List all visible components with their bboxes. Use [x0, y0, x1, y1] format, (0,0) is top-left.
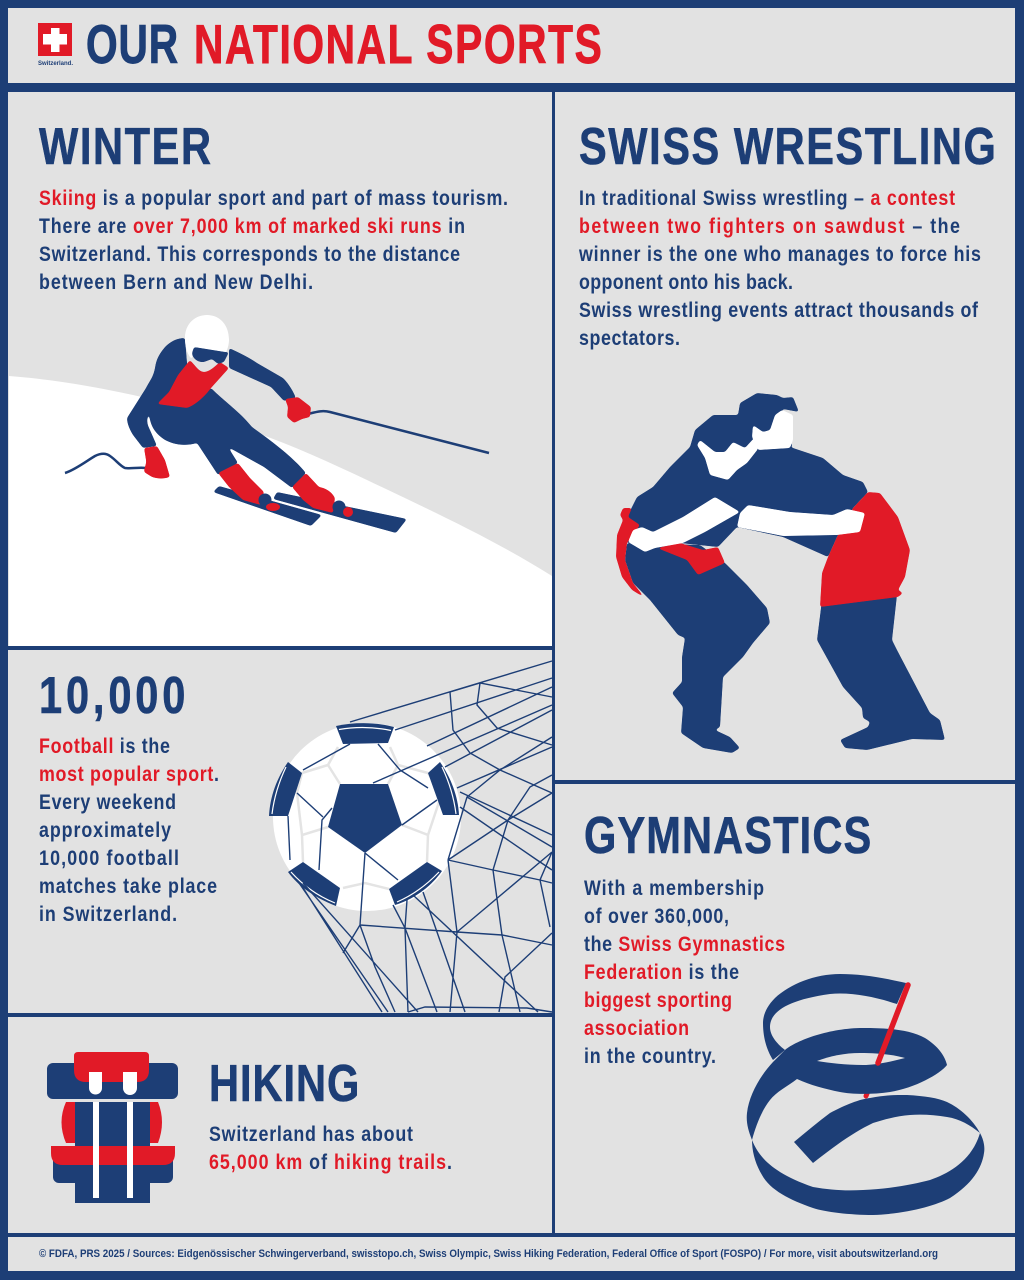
heading: winter: WINTER [39, 117, 211, 175]
text: swiss wrestling: winner is the one who manages to force his [578, 243, 981, 266]
text: football: approximately [39, 819, 171, 842]
text: hiking: Switzerland has about [209, 1123, 413, 1146]
text: winter: Skiing is a popular sport and part of mass tourism. [39, 187, 508, 210]
icon: Switzerland logo: Switzerland. [38, 61, 73, 67]
text: winter: There are over 7,000 km of marked ski runs in [39, 215, 465, 238]
heading: swiss wrestling: SWISS WRESTLING [579, 117, 996, 175]
text: hiking: 65,000 km of hiking trails. [209, 1151, 452, 1174]
panel: swiss wrestling [555, 92, 1015, 780]
illustration: wrestlers [616, 393, 945, 753]
source line: © FDFA, PRS 2025 / Sources: Eidgenössischer Schwingerverband, swisstopo.ch, Swiss Olympic, Swiss Hiking Federation, Federal Office of Sport (FOSPO) / For more, visit aboutswitzerland.org [39, 1248, 938, 1260]
text: swiss wrestling: opponent onto his back. [579, 271, 793, 294]
icon: Switzerland logo [38, 23, 73, 67]
illustration: ribbon and stick [747, 974, 984, 1215]
text: gymnastics: the Swiss Gymnastics [584, 933, 785, 956]
panel: football [8, 650, 552, 1013]
text: gymnastics: association [584, 1017, 689, 1040]
text: football: 10,000 football [39, 847, 179, 870]
text: football [39, 735, 219, 926]
text: gymnastics: Federation is the [584, 961, 739, 984]
text: winter [39, 187, 508, 294]
text: football: most popular sport. [39, 763, 219, 786]
text: swiss wrestling [578, 187, 981, 350]
text: football: Football is the [39, 735, 170, 758]
text: football: matches take place [39, 875, 217, 898]
title: OUR [86, 14, 178, 76]
icon: backpack [47, 1052, 178, 1203]
text: football: in Switzerland. [39, 903, 177, 926]
panel: gymnastics [555, 784, 1015, 1233]
footer [8, 1237, 1015, 1271]
text: gymnastics: in the country. [584, 1045, 716, 1068]
panel: winter [8, 92, 552, 646]
text: gymnastics: of over 360,000, [584, 905, 729, 928]
text: football: Every weekend [39, 791, 176, 814]
text: hiking [209, 1123, 452, 1174]
text: winter: Switzerland. This corresponds to the distance [39, 243, 460, 266]
text: swiss wrestling: between two fighters on sawdust – the [579, 215, 960, 238]
heading: hiking: HIKING [209, 1054, 359, 1112]
heading: 10,000: 10,000 [39, 666, 185, 724]
text: swiss wrestling: In traditional Swiss wrestling – a contest [579, 187, 956, 210]
text: swiss wrestling: spectators. [579, 327, 680, 350]
panel: hiking [8, 1017, 552, 1233]
text: winter: between Bern and New Delhi. [39, 271, 313, 294]
text: gymnastics [584, 877, 785, 1068]
illustration: football and net [269, 661, 552, 1012]
illustration: skier [65, 315, 489, 533]
heading: gymnastics: GYMNASTICS [584, 806, 871, 864]
title: NATIONAL SPORTS [194, 14, 602, 76]
text: gymnastics: biggest sporting [584, 989, 732, 1012]
text: swiss wrestling: Swiss wrestling events attract thousands of [579, 299, 978, 322]
header panel [8, 8, 1015, 83]
text: gymnastics: With a membership [584, 877, 764, 900]
